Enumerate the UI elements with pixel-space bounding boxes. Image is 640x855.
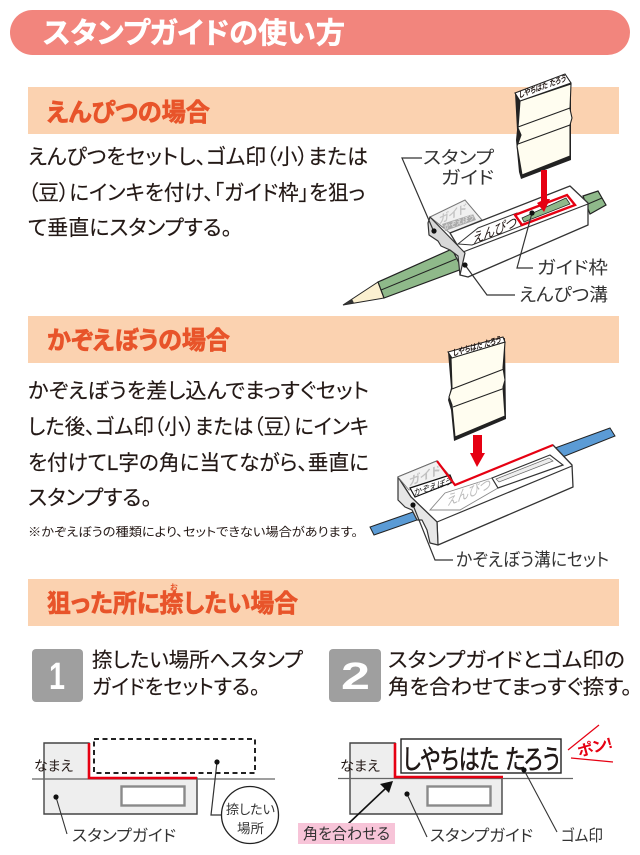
diagram: step 2 stamp alignment (298, 725, 615, 845)
icon: pencil guide body: えんぴつ (473, 214, 517, 248)
arrow: red downward (537, 170, 550, 212)
pencil instructions text: て垂直にスタンプする。 (28, 217, 232, 240)
name label: なまえ (340, 758, 380, 774)
callout: stick groove label (410, 502, 609, 570)
step 2 text (388, 649, 632, 699)
step 1 text: ガイドをセットする。 (92, 676, 260, 699)
step 2 text: 角を合わせてまっすぐ捺す。 (388, 676, 632, 699)
callout: stamp guide label (402, 148, 494, 234)
title banner (10, 10, 630, 55)
panel: counting stick section heading: かぞえぼうの場合 (47, 327, 230, 355)
step 1 (32, 649, 304, 702)
counting stick instructions text: を付けてL字の角に当てながら、垂直に (28, 452, 369, 475)
icon: step number 1: 1 (49, 656, 65, 698)
arrow: align corners (348, 781, 393, 824)
icon: rubber stamp: しやちはた たろう (453, 334, 501, 358)
icon: counting stick guide body: ガイド (409, 462, 441, 489)
panel: stamping at target heading: 狙った所に捺したい場合 (47, 590, 298, 618)
callout: pencil groove label (462, 262, 608, 305)
callout: stamp guide: スタンプガイド (430, 827, 533, 845)
callout: target location (211, 759, 278, 844)
callout: guide frame label: ガイド枠 (537, 258, 608, 278)
callout: align corners label: 角を合わせる (303, 825, 390, 843)
icon: counting stick guide body: かぞえぼう (414, 476, 452, 498)
callout: stick groove label: かぞえぼう溝にセット (456, 550, 609, 570)
callout: stamp guide label: ガイド (441, 168, 494, 188)
stamp imprint (401, 739, 561, 775)
callout: rubber stamp: ゴム印 (561, 826, 603, 845)
icon: pencil (343, 191, 606, 305)
panel: pencil section heading (28, 87, 619, 134)
callout: stamp guide label: スタンプ (423, 148, 494, 168)
callout: rubber stamp (521, 767, 603, 845)
red corner line (395, 743, 503, 777)
counting stick instructions text: かぞえぼうを差し込んでまっすぐセット (28, 380, 369, 403)
stamp imprint: しやちはた たろう (403, 745, 560, 775)
panel: pencil section heading: えんぴつの場合 (47, 99, 210, 127)
counting stick instructions text: スタンプする。 (28, 487, 152, 510)
panel: counting stick section heading (28, 316, 619, 363)
illustration: stamp guide with pencil (343, 73, 608, 305)
icon: step number 2: 2 (341, 656, 370, 698)
icon: step number 1 (32, 649, 83, 702)
callout: guide frame label (517, 210, 608, 278)
step 2 (329, 649, 632, 702)
arrow: red downward (470, 435, 485, 467)
guide shape (350, 743, 502, 814)
callout: stamp guide (404, 791, 533, 845)
illustration: stamp guide with counting stick (370, 334, 615, 570)
pencil instructions text: （豆）にインキを付け、「ガイド枠」を狙っ (28, 182, 365, 205)
footnote: ※かぞえぼうの種類により、セットできない場合があります。 (28, 524, 358, 539)
pon sound effect: ポン! (575, 735, 615, 761)
icon: rubber stamp: しやちはた たろう (519, 73, 566, 100)
icon: pencil guide body (428, 186, 588, 277)
counting stick instructions text (28, 380, 369, 510)
icon: pencil guide body: かぞえぼう (444, 212, 474, 232)
step 1 text (92, 649, 304, 699)
callout: stamp guide (53, 794, 176, 845)
dashed target area (94, 739, 255, 773)
title banner: スタンプガイドの使い方 (43, 17, 345, 50)
panel: stamping at target heading: お (170, 583, 178, 592)
icon: pencil guide body: ガイド (439, 201, 467, 227)
callout: pencil groove label: えんぴつ溝 (519, 285, 608, 305)
icon: counting stick guide body: えんぴつ (447, 476, 491, 510)
name label: なまえ (34, 758, 73, 774)
icon: counting stick guide body (398, 445, 573, 545)
icon: rubber stamp (515, 73, 572, 179)
counting stick instructions text: した後、ゴム印（小）または（豆）にインキ (28, 416, 369, 439)
red corner line (89, 743, 197, 778)
icon: step number 2 (329, 649, 381, 702)
callout: target location: 場所 (237, 821, 264, 836)
icon: blue stick (370, 428, 615, 535)
callout: stamp guide: スタンプガイド (72, 827, 176, 845)
icon: rubber stamp (448, 334, 506, 441)
pencil instructions text (28, 146, 368, 240)
guide shape (44, 743, 197, 814)
step 1 text: 捺したい場所へスタンプ (92, 649, 304, 672)
diagram: step 1 guide placement (32, 739, 278, 845)
pon sound effect (568, 725, 615, 762)
pencil instructions text: えんぴつをセットし、ゴム印（小）または (28, 146, 368, 169)
step 2 text: スタンプガイドとゴム印の (388, 649, 625, 672)
callout: target location: 捺したい (226, 802, 275, 817)
panel: stamping at target heading (28, 579, 619, 626)
